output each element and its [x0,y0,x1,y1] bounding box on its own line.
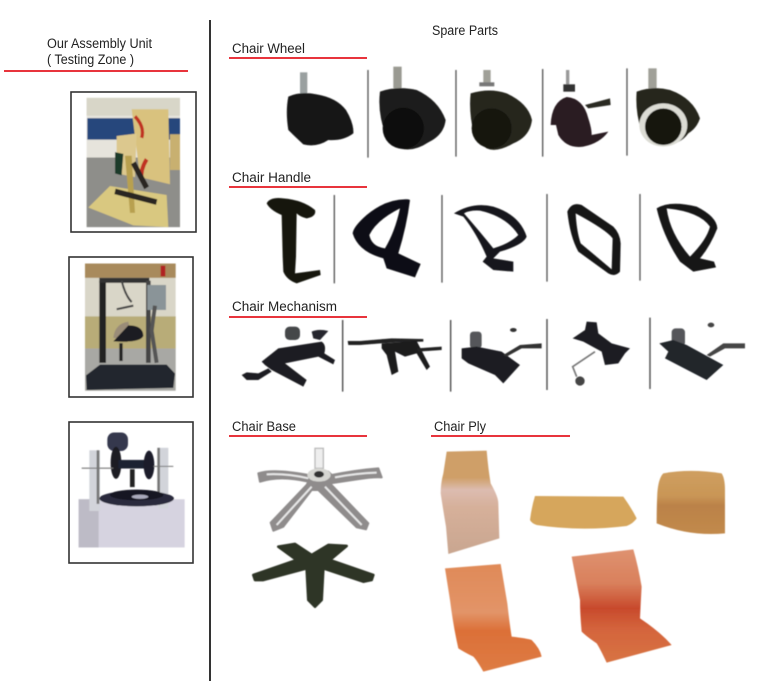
heading: chair handle [229,170,367,188]
heading: chair base: Chair Base [232,419,296,434]
heading: our assembly unit [4,36,188,72]
heading: our assembly unit: Our Assembly Unit [47,36,152,51]
heading: chair wheel [229,41,367,59]
photo: testing rig three [69,422,193,563]
section: chair base [229,419,382,607]
panel: assembly unit [4,36,196,563]
heading: chair wheel: Chair Wheel [232,41,305,56]
wheels four and five [543,68,700,157]
heading: chair base [229,419,367,437]
heading: chair ply [431,419,570,437]
black five-star base [253,544,373,607]
handles four and five [547,194,717,282]
chrome five-star base [258,448,382,531]
heading: chair mechanism [229,299,367,318]
heading: chair mechanism: Chair Mechanism [232,299,337,314]
heading: our assembly unit: ( Testing Zone ) [47,52,134,67]
section: chair mechanism [229,299,745,392]
heading: chair handle: Chair Handle [232,170,311,185]
section: chair handle [229,170,717,283]
section: chair wheel [229,41,700,158]
photo: testing rig two [69,257,193,397]
mechanisms one to three [242,320,542,392]
section: chair ply [431,419,725,672]
handles one to three [267,195,527,283]
heading: chair ply: Chair Ply [434,419,486,434]
mechanisms four and five [510,318,745,390]
vertical divider [209,20,211,681]
photo: testing rig one [71,92,196,232]
ply panels [441,451,725,672]
heading: spare parts: Spare Parts [432,23,498,38]
wheels one to three [287,67,532,158]
